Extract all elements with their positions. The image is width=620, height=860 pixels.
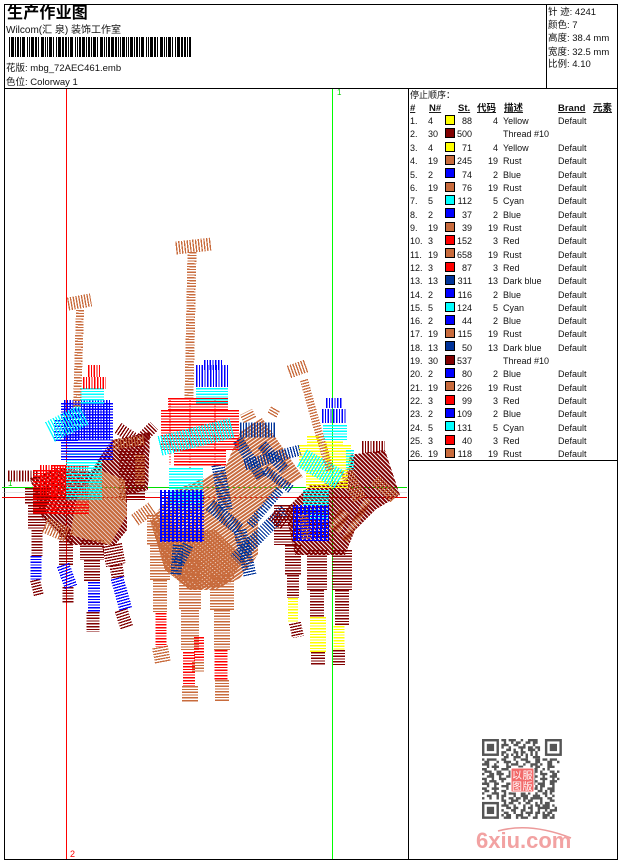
barcode [9, 37, 191, 57]
table rows: Default [558, 383, 587, 393]
table rows: 19 [428, 329, 438, 339]
table rows: 44 [462, 316, 472, 326]
table rows: 19 [488, 449, 498, 459]
table rows [410, 116, 587, 459]
table rows: 24. [410, 423, 423, 433]
leg bands [36, 556, 126, 612]
table rows: Blue [503, 369, 521, 379]
left camel body and legs [8, 426, 154, 632]
table rows: 2. [410, 129, 418, 139]
table rows: 19 [428, 156, 438, 166]
embroidery: centre camel and rider [135, 244, 303, 702]
table rows: Default [558, 210, 587, 220]
table rows: 15. [410, 303, 423, 313]
table rows: 19 [428, 250, 438, 260]
table rows: 71 [462, 143, 472, 153]
table rows: 17. [410, 329, 423, 339]
table rows: 3 [428, 396, 433, 406]
table rows: 13 [488, 276, 498, 286]
table rows: Blue [503, 316, 521, 326]
table rows: Default [558, 250, 587, 260]
design file name: 花版: mbg_72AEC461.emb [6, 62, 121, 74]
embroidery: right camel and rider [272, 366, 400, 665]
table rows: 25. [410, 436, 423, 446]
table header: 元素 [593, 102, 612, 114]
table rows: 20. [410, 369, 423, 379]
table rows: 3 [428, 263, 433, 273]
table rows: 87 [462, 263, 472, 273]
table rows: 118 [458, 449, 472, 459]
table rows: Default [558, 196, 587, 206]
table rows: Default [558, 116, 587, 126]
table header [410, 102, 612, 114]
table rows: 30 [428, 356, 438, 366]
table rows: 40 [462, 436, 472, 446]
table rows: Default [558, 263, 587, 273]
left rider [40, 300, 110, 515]
table rows: 3 [493, 436, 498, 446]
table rows: 2 [493, 369, 498, 379]
table rows: 5 [428, 196, 433, 206]
table rows: 4. [410, 156, 418, 166]
table rows: 5 [493, 196, 498, 206]
table rows: 1. [410, 116, 418, 126]
QR centre seal: 以 [512, 771, 522, 782]
table rows: Dark blue [503, 343, 542, 353]
table rows: 8. [410, 210, 418, 220]
table rows: Default [558, 436, 587, 446]
table rows: Red [503, 396, 520, 406]
table rows: Default [558, 143, 587, 153]
embroidery: left camel and rider [8, 300, 154, 632]
table rows: 19 [428, 223, 438, 233]
table rows: 2 [428, 409, 433, 419]
title: 生产作业图 [7, 4, 88, 22]
table rows: 19 [488, 250, 498, 260]
table rows: Blue [503, 210, 521, 220]
table rows: Dark blue [503, 276, 542, 286]
table rows: Red [503, 436, 520, 446]
table rows: 2 [428, 316, 433, 326]
table rows: Rust [503, 383, 522, 393]
table rows: 109 [457, 409, 472, 419]
table rows: 4 [493, 116, 498, 126]
table header: N# [429, 103, 442, 114]
table rows: 116 [458, 290, 472, 300]
stop sequence table [410, 89, 612, 459]
table rows: 19 [488, 383, 498, 393]
table rows: 39 [462, 223, 472, 233]
table rows: 2 [493, 170, 498, 180]
table header: 代码 [477, 102, 497, 114]
table rows: Red [503, 236, 520, 246]
table rows: 13 [428, 343, 438, 353]
design statistics: 高度: 38.4 mm [548, 32, 609, 44]
table rows: 12. [410, 263, 423, 273]
left pole [68, 300, 91, 408]
table header: Brand [558, 103, 586, 114]
table rows: Thread #10 [503, 356, 549, 366]
table rows: 3 [493, 396, 498, 406]
table rows: Default [558, 449, 587, 459]
table rows: 19 [428, 449, 438, 459]
table rows: 19 [488, 223, 498, 233]
table rows: Default [558, 156, 587, 166]
QR centre seal: 服 [522, 770, 532, 782]
guide lines: 1 [337, 88, 342, 97]
table rows: Rust [503, 156, 522, 166]
QR centre seal: 图 [512, 781, 522, 793]
right rider [289, 366, 350, 541]
table rows: 5 [428, 423, 433, 433]
table rows: 5 [428, 303, 433, 313]
table rows: Rust [503, 329, 522, 339]
table rows: 37 [462, 210, 472, 220]
table rows: Default [558, 276, 587, 286]
table rows: 23. [410, 409, 423, 419]
header: title and design info [6, 4, 191, 88]
table rows: 74 [462, 170, 472, 180]
table rows: 2 [493, 290, 498, 300]
table rows: 311 [458, 276, 472, 286]
table rows: 16. [410, 316, 423, 326]
table rows: Default [558, 369, 587, 379]
table rows: 2 [428, 170, 433, 180]
table rows: Rust [503, 449, 522, 459]
table rows: 76 [462, 183, 472, 193]
table rows: Default [558, 290, 587, 300]
table rows: 4 [428, 143, 433, 153]
table rows: 11. [410, 250, 422, 260]
table rows: 80 [462, 369, 472, 379]
centre camel body and legs [135, 408, 303, 702]
table rows: 124 [457, 303, 472, 313]
table rows: 14. [410, 290, 423, 300]
centre rider [160, 244, 232, 542]
table rows: 19 [488, 156, 498, 166]
table rows: 26. [410, 449, 423, 459]
table title: 停止顺序： [410, 89, 455, 100]
design statistics [548, 6, 609, 70]
table rows: Red [503, 263, 520, 273]
table rows: 6. [410, 183, 418, 193]
table header: # [410, 103, 416, 114]
table rows: 19 [428, 383, 438, 393]
table rows: 5. [410, 170, 418, 180]
table rows: Default [558, 343, 587, 353]
table rows: 19 [488, 329, 498, 339]
table rows: Cyan [503, 303, 524, 313]
harness [176, 430, 300, 575]
leg bands [161, 613, 221, 686]
table rows: 5 [493, 423, 498, 433]
table rows: 19. [410, 356, 423, 366]
table rows: 2 [428, 290, 433, 300]
table header: 描述 [504, 102, 524, 114]
table rows: 245 [457, 156, 472, 166]
table rows: Default [558, 396, 587, 406]
table rows: Rust [503, 223, 522, 233]
table rows: 19 [428, 183, 438, 193]
table rows: 3. [410, 143, 418, 153]
table rows: Blue [503, 409, 521, 419]
table rows: 19 [488, 183, 498, 193]
table rows: 2 [493, 409, 498, 419]
table rows: 3 [493, 263, 498, 273]
table rows: Default [558, 316, 587, 326]
design statistics: 宽度: 32.5 mm [548, 46, 609, 58]
QR centre seal [511, 768, 534, 793]
design statistics: 颜色: 7 [548, 19, 578, 31]
table rows: 658 [457, 250, 472, 260]
QR centre seal: 版 [522, 780, 532, 793]
guide lines: 1 [8, 479, 13, 488]
table rows: 22. [410, 396, 423, 406]
table rows: Rust [503, 183, 522, 193]
table rows: 4 [428, 116, 433, 126]
table rows: 2 [428, 210, 433, 220]
table rows: Default [558, 170, 587, 180]
table rows: Cyan [503, 423, 524, 433]
table rows: 13 [428, 276, 438, 286]
QR code [482, 740, 561, 818]
table rows: 50 [462, 343, 472, 353]
company name: Wilcom(汇 泉) 装饰工作室 [6, 23, 121, 36]
design statistics: 针 迹: 4241 [548, 6, 596, 18]
table rows: Blue [503, 170, 521, 180]
table rows: 5 [493, 303, 498, 313]
table rows: 99 [462, 396, 472, 406]
table rows: 2 [428, 369, 433, 379]
table rows: 3 [428, 436, 433, 446]
table rows: Default [558, 236, 587, 246]
colorway: 色位: Colorway 1 [6, 76, 78, 88]
table rows: 7. [410, 196, 418, 206]
table rows: Yellow [503, 143, 529, 153]
guide lines [2, 88, 407, 859]
table rows: 226 [457, 383, 472, 393]
table rows: 13. [410, 276, 423, 286]
table rows: Cyan [503, 196, 524, 206]
table rows: 18. [410, 343, 423, 353]
table rows: Default [558, 303, 587, 313]
table rows: 131 [457, 423, 472, 433]
table rows: 537 [457, 356, 472, 366]
guide lines: 2 [70, 849, 75, 859]
table rows: 2 [493, 316, 498, 326]
table rows: 112 [458, 196, 472, 206]
table rows: 115 [458, 329, 472, 339]
table rows: 88 [462, 116, 472, 126]
table rows: 3 [493, 236, 498, 246]
table rows: Default [558, 409, 587, 419]
table rows: Default [558, 329, 587, 339]
table rows: 13 [488, 343, 498, 353]
table rows: Yellow [503, 116, 529, 126]
table rows: 30 [428, 129, 438, 139]
design statistics: 比例: 4.10 [548, 58, 591, 70]
table rows: Blue [503, 290, 521, 300]
leg bands [293, 598, 339, 652]
table rows: Rust [503, 250, 522, 260]
table rows: Default [558, 423, 587, 433]
table rows: Default [558, 183, 587, 193]
table rows: 3 [428, 236, 433, 246]
table rows: 500 [457, 129, 472, 139]
table rows: 152 [457, 236, 472, 246]
table rows: Thread #10 [503, 129, 549, 139]
table rows: Default [558, 223, 587, 233]
right camel body and legs [272, 447, 400, 665]
watermark logo: 6xiu.com [476, 828, 571, 853]
centre pole [176, 244, 212, 398]
table header: St. [458, 103, 470, 114]
table rows: 4 [493, 143, 498, 153]
table rows: 21. [410, 383, 423, 393]
right pole [289, 366, 330, 470]
table rows: 9. [410, 223, 418, 233]
table rows: 2 [493, 210, 498, 220]
table rows: 10. [410, 236, 423, 246]
